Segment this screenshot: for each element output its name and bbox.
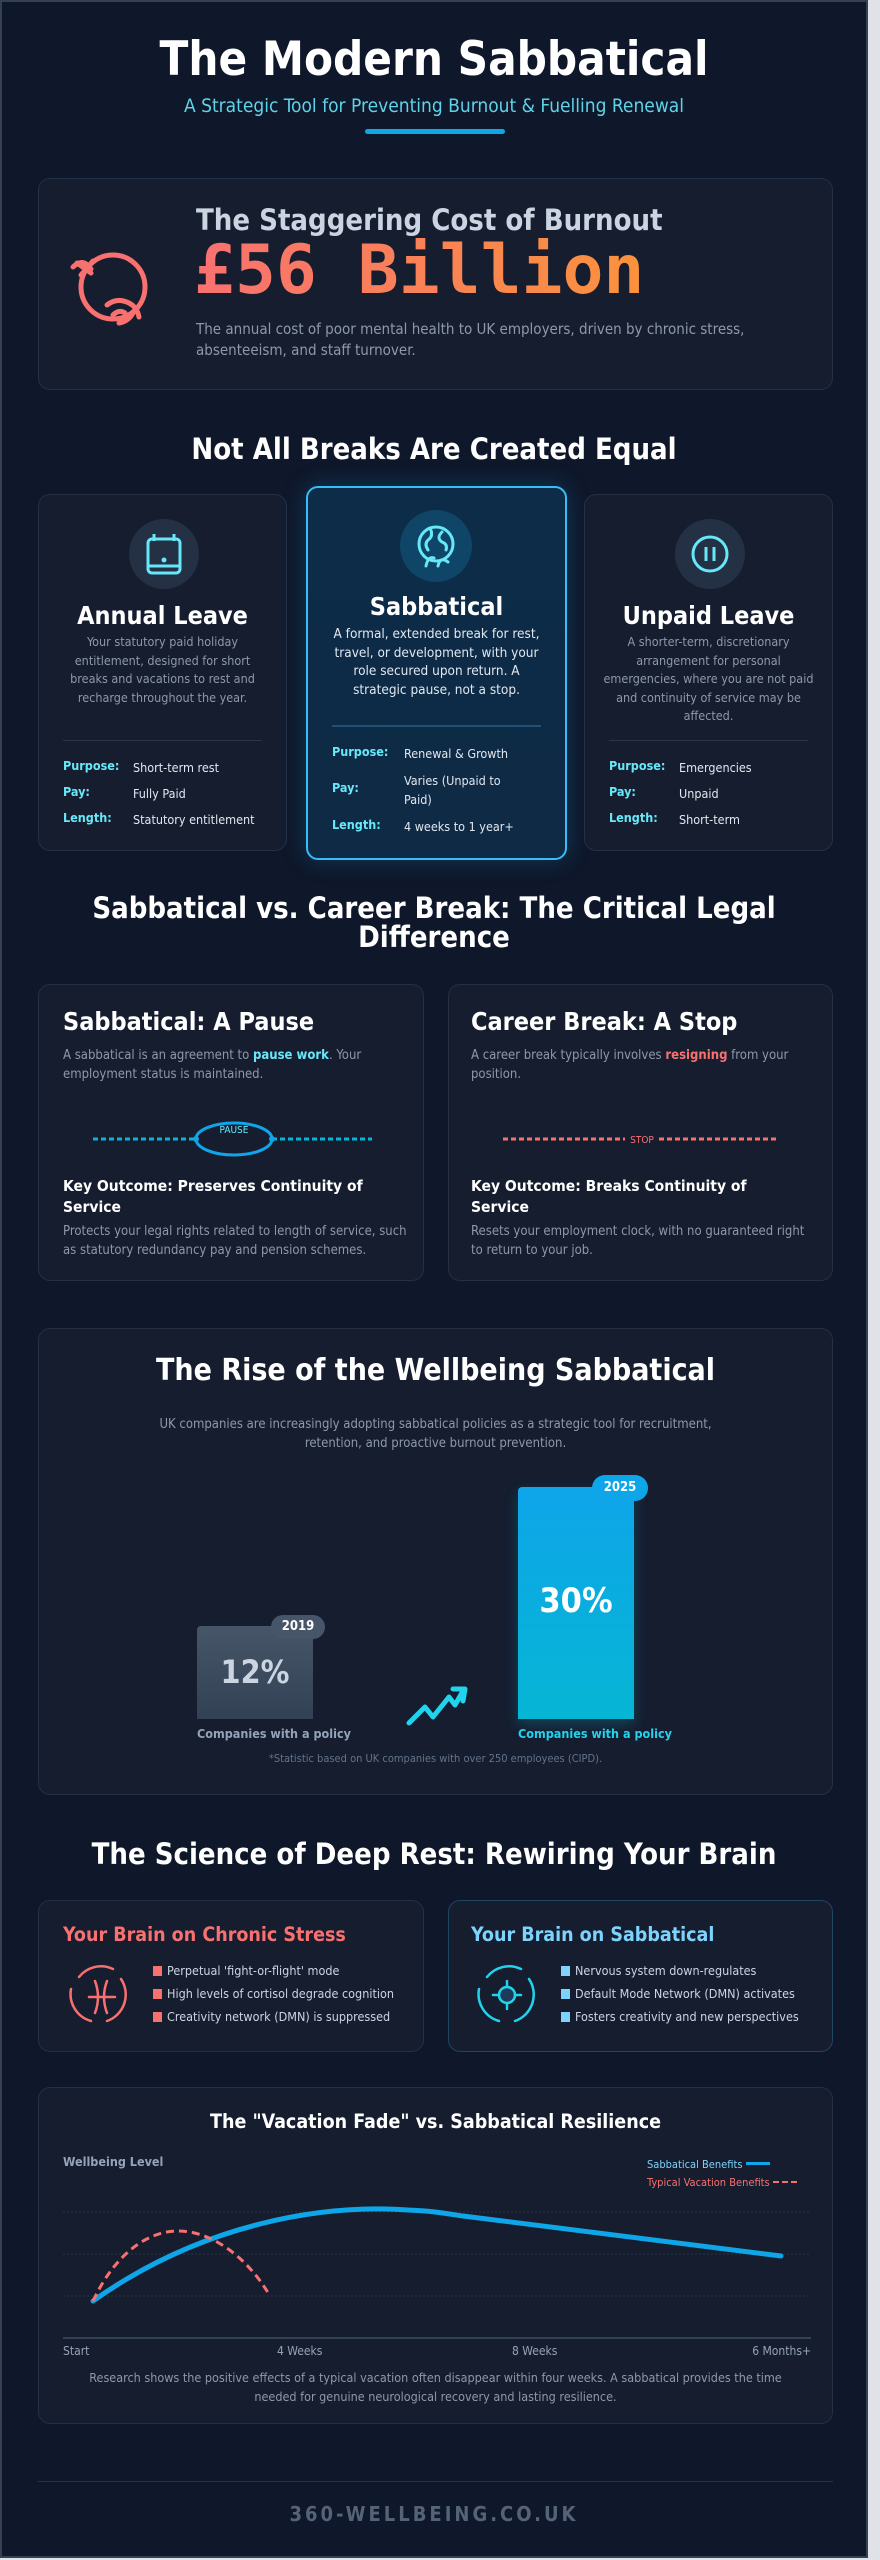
panel: career break stop	[448, 984, 833, 1281]
rows: annual leave details: Purpose:	[63, 758, 119, 773]
rows: unpaid leave details: Emergencies	[679, 760, 752, 775]
axis labels: Start	[63, 2344, 89, 2358]
legend	[646, 2158, 797, 2189]
heading: legal difference: Difference	[358, 920, 510, 954]
legend: Sabbatical Benefits	[647, 2158, 743, 2171]
rows: sabbatical details: 4 weeks to 1 year+	[404, 819, 514, 834]
bar chart: 2025	[512, 1475, 672, 1741]
title: The Modern Sabbatical	[160, 32, 708, 87]
stat: £56 Billion: £56 Billion	[194, 231, 644, 310]
list: sabbatical effects: Default Mode Network (DMN) activates	[575, 1986, 795, 2001]
bar chart: 2019	[197, 1615, 351, 1741]
axis labels: 6 Months+	[752, 2344, 811, 2358]
rows: annual leave details: Length:	[63, 810, 112, 825]
rows: unpaid leave details	[609, 758, 752, 827]
panel: annual leave: Your statutory paid holiday entitlement, designed for short breaks and vacations to rest and recharge throughout the year.	[70, 634, 255, 704]
heading: legal difference: Sabbatical vs. Career Break: The Critical Legal	[92, 891, 776, 925]
panel: career break stop: Key Outcome: Breaks Continuity of Service	[471, 1177, 747, 1216]
icon: stressed brain	[70, 252, 148, 326]
bar chart: 2019: 12%	[221, 1653, 289, 1691]
panel: sabbatical (highlighted)	[306, 486, 567, 860]
panel: sabbatical (highlighted): Sabbatical	[370, 592, 503, 621]
list: stress effects: Creativity network (DMN) is suppressed	[167, 2009, 390, 2024]
rows: sabbatical details	[332, 744, 514, 834]
bar chart: 2019: 2019	[282, 1619, 314, 1634]
icon: trend arrow	[406, 1686, 468, 1726]
list: stress effects	[153, 1963, 394, 2024]
panel: cost of burnout	[38, 178, 833, 390]
icon: pause	[675, 519, 745, 589]
rows: unpaid leave details: Purpose:	[609, 758, 665, 773]
heading: breaks: Not All Breaks Are Created Equal	[191, 432, 677, 466]
panel: sabbatical pause	[38, 984, 424, 1281]
rows: unpaid leave details: Short-term	[679, 812, 740, 827]
panel: unpaid leave	[584, 494, 833, 851]
subtitle: A Strategic Tool for Preventing Burnout & Fuelling Renewal	[184, 95, 684, 117]
list: sabbatical effects: Fosters creativity and new perspectives	[575, 2009, 799, 2024]
panel: career break stop: A career break typically involves resigning from your position.	[471, 1048, 788, 1082]
line chart	[63, 2206, 811, 2339]
heading: cost: The Staggering Cost of Burnout	[196, 203, 663, 237]
list: stress effects: Perpetual 'fight-or-flight' mode	[167, 1963, 339, 1978]
diagram: pause	[93, 1122, 372, 1156]
rows: annual leave details: Short-term rest	[133, 760, 219, 775]
panel: career break stop: Resets your employment clock, with no guaranteed right to return to your job.	[471, 1224, 804, 1258]
panel: rise of wellbeing sabbatical: UK companies are increasingly adopting sabbatical policies as a strategic tool for recruitment, retention, and proactive burnout prevention.	[159, 1417, 712, 1450]
rows: annual leave details: Statutory entitlement	[133, 812, 255, 827]
rows: annual leave details	[63, 758, 255, 827]
panel: brain on sabbatical	[448, 1900, 833, 2052]
rows: sabbatical details: Purpose:	[332, 744, 388, 759]
rows: sabbatical details: Varies (Unpaid to Paid)	[404, 773, 501, 807]
icon: globe/traveller	[400, 510, 472, 582]
panel: annual leave	[38, 494, 287, 851]
heading: legal difference	[92, 891, 776, 954]
bar chart: 2019: Companies with a policy	[197, 1726, 351, 1741]
legend: Typical Vacation Benefits	[647, 2176, 770, 2189]
rows: sabbatical details: Renewal & Growth	[404, 746, 508, 761]
footnote: *Statistic based on UK companies with over 250 employees (CIPD).	[269, 1752, 602, 1765]
panel: sabbatical pause: Key Outcome: Preserves Continuity of Service	[63, 1177, 363, 1216]
list: stress effects: High levels of cortisol degrade cognition	[167, 1986, 394, 2001]
text: cost description: The annual cost of poor mental health to UK employers, driven by chronic stress, absenteeism, and staff turnover.	[196, 320, 744, 359]
rows: unpaid leave details: Unpaid	[679, 786, 719, 801]
panel: rise of wellbeing sabbatical	[38, 1328, 833, 1795]
panel: unpaid leave: A shorter-term, discretionary arrangement for personal emergencies, where you are not paid and continuity of service may be affected.	[604, 634, 813, 723]
icon: calm brain	[477, 1965, 535, 2022]
panel: brain on sabbatical: Your Brain on Sabbatical	[471, 1923, 714, 1946]
panel: sabbatical pause: Sabbatical: A Pause	[63, 1007, 314, 1036]
panel: vacation fade chart	[38, 2087, 833, 2424]
rows: unpaid leave details: Length:	[609, 810, 658, 825]
rows: sabbatical details: Length:	[332, 817, 381, 832]
panel: sabbatical pause: Protects your legal rights related to length of service, such as statutory redundancy pay and pension schemes.	[63, 1224, 407, 1258]
diagram: stop: STOP	[630, 1135, 654, 1146]
panel: brain on stress	[38, 1900, 424, 2052]
heading: science of rest: The Science of Deep Rest: Rewiring Your Brain	[92, 1837, 776, 1871]
panel: unpaid leave: Unpaid Leave	[623, 601, 794, 630]
axis labels: 8 Weeks	[512, 2344, 557, 2358]
panel: sabbatical (highlighted): A formal, extended break for rest, travel, or development, with your role secured upon return. A strategic pause, not a stop.	[334, 626, 539, 698]
rows: sabbatical details: Pay:	[332, 780, 359, 795]
bar chart: 2025: 2025	[604, 1480, 636, 1495]
axis labels	[63, 2344, 811, 2358]
list: sabbatical effects: Nervous system down-regulates	[575, 1963, 756, 1978]
panel: vacation fade chart: The "Vacation Fade" vs. Sabbatical Resilience	[210, 2110, 661, 2133]
panel: annual leave: Annual Leave	[77, 601, 248, 630]
footer: 360-WELLBEING.CO.UK	[289, 2502, 578, 2526]
list: sabbatical effects	[561, 1963, 799, 2024]
rows: unpaid leave details: Pay:	[609, 784, 636, 799]
icon: calendar	[129, 519, 199, 589]
panel: rise of wellbeing sabbatical: The Rise of the Wellbeing Sabbatical	[156, 1353, 715, 1388]
panel: brain on stress: Your Brain on Chronic Stress	[63, 1923, 346, 1946]
icon: stress brain	[69, 1965, 127, 2022]
rows: annual leave details: Fully Paid	[133, 786, 186, 801]
caption: Research shows the positive effects of a typical vacation often disappear within four weeks. A sabbatical provides the time needed for genuine neurological recovery and lasting resilience.	[89, 2370, 782, 2404]
bar chart: 2025: 30%	[539, 1581, 613, 1621]
axis labels: 4 Weeks	[277, 2344, 322, 2358]
rows: annual leave details: Pay:	[63, 784, 90, 799]
diagram: pause: PAUSE	[220, 1125, 249, 1136]
title underline	[365, 129, 505, 134]
panel: career break stop: Career Break: A Stop	[471, 1007, 737, 1036]
panel: sabbatical pause: A sabbatical is an agreement to pause work. Your employment status is maintained.	[63, 1048, 361, 1082]
panel: vacation fade chart: Wellbeing Level	[63, 2154, 163, 2169]
bar chart: 2025: Companies with a policy	[518, 1726, 672, 1741]
